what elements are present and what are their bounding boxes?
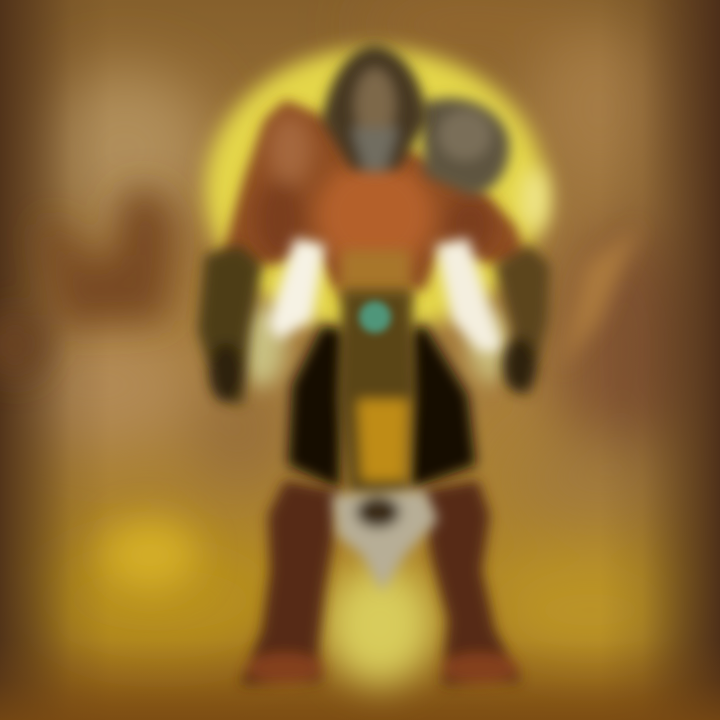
white left arm — [268, 238, 325, 340]
shoulders and torso — [215, 100, 535, 290]
helmet and head — [322, 45, 428, 172]
right gauntlet — [495, 245, 550, 395]
left boot — [240, 480, 340, 685]
warrior figure — [198, 45, 550, 685]
central loincloth — [338, 290, 416, 495]
black legs upper — [288, 325, 476, 490]
left gauntlet — [198, 245, 262, 405]
wisp at right — [560, 225, 640, 370]
chest — [256, 115, 494, 270]
right boot — [420, 480, 522, 685]
yellow glow at lower left — [102, 519, 198, 591]
white right arm — [436, 238, 503, 352]
right shoulder armour — [420, 98, 509, 195]
pale glow at right of halo — [521, 168, 549, 232]
abdomen — [338, 250, 412, 300]
belt skulls — [332, 490, 438, 592]
lower glow between legs — [325, 565, 435, 685]
smoke silhouette at left — [0, 189, 175, 377]
turquoise gem — [359, 301, 391, 333]
glow behind arms — [238, 303, 512, 387]
halo — [205, 48, 545, 332]
